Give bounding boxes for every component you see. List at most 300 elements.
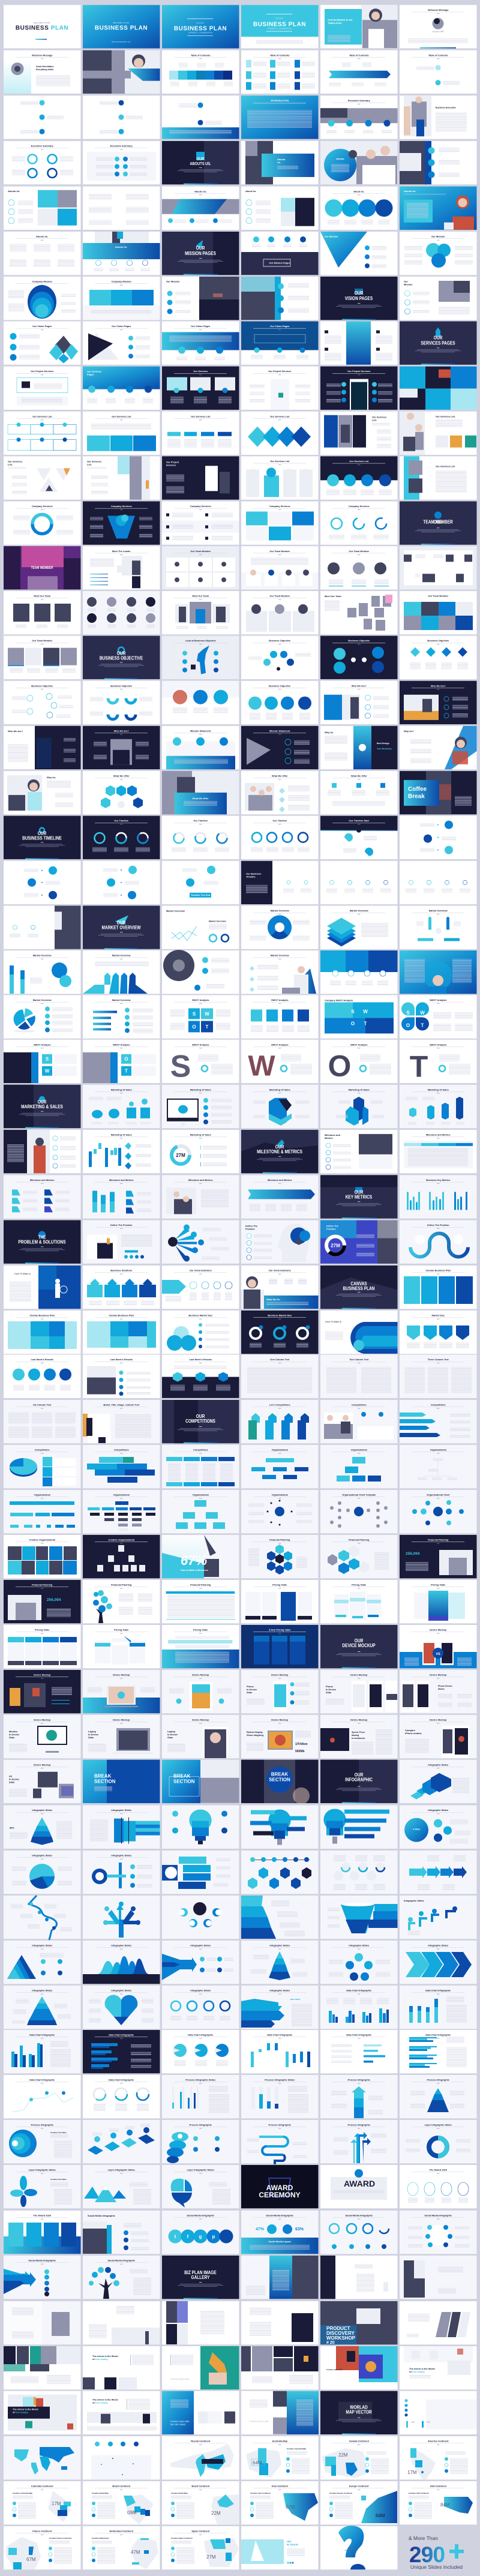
- slide: market overview horizontal bars: [83, 995, 160, 1039]
- slide: market overview man laptop: [241, 950, 318, 994]
- slide: france continent: France Continent: [32, 2530, 52, 2533]
- slide: timeline end: Timeline The End: [191, 893, 211, 896]
- slide: biz plan image gallery divider: BIZ PLAN IMAGE: [184, 2269, 217, 2275]
- slide: company services cycle: [4, 502, 80, 545]
- slide: six column text: Six Column Text: [33, 1404, 52, 1407]
- slide: infographic phone bars: Infographic Slides: [111, 1809, 131, 1812]
- slide: pricing table gradient: [162, 1625, 239, 1668]
- slide: data chart dark: Data Chart Infographic: [109, 2034, 134, 2037]
- slide: data chart horizontal: Data Chart Infographic: [346, 2034, 372, 2037]
- slide: speed from blazing: Device Mockup: [350, 1719, 368, 1722]
- slide: organizational wide: [4, 1490, 80, 1533]
- slide: abouts us blue box: [241, 141, 318, 184]
- slide: pricing table ribbon: Pricing Table: [114, 1629, 129, 1632]
- slide: laptop device: Laptop: [88, 1730, 97, 1733]
- slide: company services donuts: Company Services: [349, 505, 370, 508]
- slide: define the problem purple: [320, 1220, 397, 1264]
- slide: russia continent: [162, 2436, 239, 2479]
- slide: creative organizational dark: [83, 1535, 160, 1578]
- slide: product discovery workshop: WORKSHOP: [326, 2335, 356, 2341]
- slide: canvas treemap 1: Canvas Business Plan: [29, 1314, 55, 1317]
- slide: table of contents timeline: [400, 50, 476, 94]
- slide: infographic petals: [320, 1941, 397, 1984]
- slide: meet our team scattered: [320, 591, 397, 634]
- slide: competitions table: [162, 1445, 239, 1488]
- slide: infographic arrows: [400, 1851, 476, 1894]
- slide: about us divider: ABOUTS US.: [190, 162, 211, 166]
- slide: swot O T photo: SWOT Analysis: [113, 1043, 130, 1046]
- row 24: [4, 1040, 476, 1084]
- slide: asia continent: Asia Continent: [272, 2485, 289, 2488]
- slide: business objective dark circles: [320, 636, 397, 679]
- slide: swot O T photo: [83, 1040, 160, 1083]
- slide: executive summary photo band: Executive Summary: [348, 99, 371, 102]
- slide: what we offer icons: What We Offer: [351, 775, 367, 778]
- slide: coffee break: [400, 771, 476, 814]
- slide: swot big T: T: [410, 1050, 428, 1084]
- slide: our project services devices: Services: [166, 463, 176, 466]
- slide: our infographic divider: INFOGRAPHIC: [345, 1777, 373, 1783]
- slide: data chart groups: Data Chart Infographic: [346, 1989, 372, 1992]
- slide: our services photos: Our Services: [87, 460, 101, 463]
- row 12: [4, 502, 476, 545]
- slide: canvas business plan: Canvas Business Plan: [425, 1269, 451, 1272]
- slide: canvas treemap 1: [4, 1311, 80, 1354]
- slide: financial planning hexagons 2: Financial Planning: [349, 1539, 370, 1542]
- slide: data chart stacked: Data Chart Infographic: [425, 1989, 451, 1992]
- slide: milestone metrics divider: OUR: [275, 1144, 284, 1150]
- closing callout: more than 290 unique slides: 290: [409, 2542, 445, 2567]
- slide: swot big W: SWOT Analysis: [271, 1043, 289, 1046]
- slide: tablet device: In Device: [167, 1733, 178, 1736]
- slide: break section split: BREAK: [173, 1774, 191, 1779]
- slide: infographic steps: Infographic Slides: [404, 1899, 424, 1902]
- slide: cover 2020: 2020: [196, 22, 205, 24]
- slide: product discovery workshop: PRODUCT: [326, 2326, 350, 2331]
- slide: our team member four photos: Our Team Member: [32, 639, 53, 642]
- slide: speed from blazing: blazing: [352, 1734, 359, 1737]
- slide: process infographic discs: Process Infographic: [190, 2124, 212, 2127]
- slide: mirror of the world: of true beauty: [92, 2358, 109, 2361]
- slide: organizational tree: [162, 1490, 239, 1533]
- slide: tablet device: [162, 1715, 239, 1758]
- slide: what we offer icons: [320, 771, 397, 814]
- slide: marketing sales coins: [83, 1085, 160, 1128]
- slide: company mission nested ovals: Company Mission: [32, 280, 53, 283]
- slide: financial planning hexagons: [241, 1535, 318, 1578]
- slide: gallery four: [83, 2301, 160, 2344]
- slide: swot analysis squares: [162, 995, 239, 1039]
- slide: retina display: [241, 1715, 318, 1758]
- slide: pricing table 1: Pricing Table: [272, 1584, 287, 1587]
- slide: our vision pages divider: OUR: [355, 290, 364, 296]
- slide: our team member cards circles: Our Team Member: [269, 595, 290, 598]
- slide: company mission nested ovals: [4, 277, 80, 320]
- slide: swot big O: [320, 1040, 397, 1083]
- slide: netherland continent: Netherland Continent: [109, 2530, 134, 2533]
- slide: infographic heart: Infographic Slides: [111, 1989, 131, 1992]
- slide: company swot analysis: W: [363, 1009, 368, 1014]
- slide: our mission bridge photo: [400, 277, 476, 320]
- slide: data chart pies: Data Chart Infographic: [188, 2034, 214, 2037]
- slide: why us woman left: [4, 771, 80, 814]
- slide: swot analysis squares: O: [192, 1024, 196, 1030]
- slide: mission statement dark: Mission Statement: [269, 729, 290, 732]
- slide: timeline drops: [400, 816, 476, 859]
- slide: abouts us band: Abouts Us.: [194, 190, 207, 193]
- slide: infographic pyramid: 85%: [10, 1827, 14, 1830]
- slide: milestone metrics table: [400, 1130, 476, 1173]
- row 14: [4, 591, 476, 634]
- slide: device mockup vs phones: Device Mockup: [430, 1629, 447, 1632]
- slide: break section blue: SECTION: [94, 1779, 116, 1785]
- slide: world map dots: [400, 2391, 476, 2434]
- slide: spain continent: [162, 2526, 239, 2569]
- slide: our mission pages divider: [162, 232, 239, 275]
- slide: social media layout: 63%: [295, 2227, 304, 2232]
- slide: our timeline start: [320, 816, 397, 859]
- slide: marketing sales monitor: Marketing Of Sales: [190, 1088, 211, 1091]
- slide: company swot analysis: O: [351, 1021, 355, 1026]
- slide: marketing sales cubes: Marketing Of Sales: [349, 1088, 370, 1091]
- slide: canvas business plan divider: [320, 1265, 397, 1309]
- row 9: [4, 367, 476, 410]
- slide: social media donuts: Social Media Infographic: [345, 2214, 373, 2217]
- slide: milestone metrics chevrons: [241, 1175, 318, 1219]
- row 15: [4, 636, 476, 679]
- slide: product discovery workshop: [320, 2301, 397, 2345]
- slide: financial planning tree: [83, 1580, 160, 1623]
- slide: about us divider: OUR: [197, 157, 205, 161]
- slide: our competitions divider: [162, 1400, 239, 1443]
- row 50: [4, 2211, 476, 2254]
- slide: our project services phone: Our Project Services: [268, 370, 291, 373]
- slide: swot big O: SWOT Analysis: [350, 1043, 368, 1046]
- slide: speed from blazing: Speed, From: [352, 1731, 365, 1734]
- slide: infographic stairs: [400, 1760, 476, 1803]
- slide: gallery black panel: [320, 2256, 397, 2299]
- slide: business objective dark circles: Business Objective: [348, 639, 370, 642]
- slide: creative organizational: [4, 1535, 80, 1578]
- slide: our mission road: Our Mission Pages: [269, 262, 290, 264]
- slide: swot analysis squares: S: [193, 1011, 196, 1016]
- slide: marketing sales cubes: [320, 1085, 397, 1128]
- row 27: [4, 1175, 476, 1219]
- slide: all in device: Device Mockup: [34, 1763, 51, 1766]
- slide: marketing sales 3d pie: [241, 1085, 318, 1128]
- slide: swot big S: S: [170, 1049, 191, 1084]
- slide: device mockup tablet: Device Mockup: [192, 1674, 209, 1677]
- slide: infographic cone: [241, 1941, 318, 1984]
- slide: world map divider: MAP VECTOR: [346, 2409, 372, 2415]
- slide: market overview bars and circles: Market Overview: [33, 954, 52, 957]
- slide: social media donuts: [320, 2211, 397, 2254]
- slide: welcome message portrait: Everything better: [36, 68, 54, 71]
- slide: process infographic sphere: [4, 2120, 80, 2163]
- slide: asia continent: Creative Asia Continent: [250, 2492, 271, 2494]
- slide: business timeline divider: [4, 816, 80, 859]
- slide: market overview pie: Market Overview: [33, 998, 52, 1001]
- slide: swot O T photo: O: [124, 1057, 128, 1062]
- slide: pricing table 3: [400, 1580, 476, 1623]
- slide: speed from blazing: [320, 1715, 397, 1758]
- slide: market overview layers: [320, 905, 397, 949]
- slide: milestone metrics table: Milestone and Metrics: [426, 1133, 451, 1136]
- slide: timeline 2: [83, 95, 160, 139]
- slide: layer infographic butterfly: [4, 2165, 80, 2208]
- slide: marketing sales columns: [400, 1085, 476, 1128]
- slide: infographic arrow fan: Infographic Slides: [190, 1944, 211, 1947]
- slide: our team member six portraits: [400, 546, 476, 589]
- slide: company services list: Company Services: [190, 505, 211, 508]
- slide: cover white: [4, 5, 80, 49]
- slide: our project services box: Our Project Services: [31, 370, 53, 373]
- slide: look at business objective: Look at Business Objective: [185, 639, 216, 642]
- slide: business objective ring icons: Business Objective: [31, 684, 53, 687]
- row 19: [4, 816, 476, 859]
- slide: layer infographic ring: Layer Infographic Slides: [425, 2124, 452, 2127]
- slide: guitar woman: [4, 1130, 80, 1173]
- slide: who we are left: Who We Are?: [8, 730, 23, 733]
- slide: our mission pages divider: OUR: [196, 245, 205, 251]
- slide: our services photos: List.: [87, 463, 92, 466]
- slide: social media arrows: Social Media Infographic: [28, 2259, 56, 2262]
- slide: market overview up arrows: [83, 950, 160, 994]
- slide: data chart donuts: Data Chart Infographic: [109, 2079, 134, 2082]
- slide: pricing table 2: [320, 1580, 397, 1623]
- slide: swot O T photo: T: [125, 1069, 128, 1074]
- slide: netherland continent: Creative Netherland: [92, 2537, 109, 2539]
- slide: business objective pins: Business Objective: [269, 639, 291, 642]
- slide: milestone metrics street: Metrics: [325, 1136, 333, 1139]
- slide: executive summary panel: Executive Summary: [110, 145, 133, 148]
- slide: process infographic bars: [162, 2075, 239, 2118]
- slide: timeline with keyboard photo: [4, 905, 80, 949]
- slide: colombia continent: Creative Colombia Map: [13, 2492, 32, 2494]
- slide: abouts us with photos: [4, 187, 80, 230]
- slide: our mission triangle: Our Mission: [325, 235, 338, 238]
- slide: social media central: Social Media Infographic: [424, 2214, 452, 2217]
- slide: infographic waves: [241, 1896, 318, 1939]
- slide: marketing sales columns: Marketing Of Sales: [428, 1088, 449, 1091]
- slide: cyan panel 14: [241, 2391, 319, 2434]
- slide: about us band icons: Abouts Us.: [115, 245, 127, 248]
- slide: device mockup phone: Phone: [247, 1685, 254, 1688]
- slide: swot clover: T: [421, 1022, 424, 1028]
- slide: financial planning table: Financial Planning: [190, 1584, 211, 1587]
- slide: infographic steps: [400, 1896, 476, 1939]
- slide: abouts us blue box: Us.: [277, 161, 281, 164]
- slide: business objective divider: OUR: [117, 650, 126, 656]
- slide: social media layout: Social Media Layout: [268, 2240, 291, 2243]
- slide: organizational 2: Organizational: [351, 1449, 367, 1452]
- slide: retina display: Device Mockup: [271, 1719, 289, 1722]
- slide: financial planning dark photo: Financial Planning: [428, 1539, 449, 1542]
- slide: our team member cards: [162, 546, 239, 589]
- slide: our services list bars: [162, 412, 239, 455]
- slide: marketing sales divider: [4, 1085, 80, 1128]
- slide: marketing sales monitor: [162, 1085, 239, 1128]
- slide: mirror with row of images: [83, 2391, 160, 2434]
- slide: cover 2020: [162, 5, 239, 49]
- slide: social media infographic building: Social Media Infographic: [88, 2214, 116, 2217]
- slide: organizational chart circles: [400, 1490, 476, 1533]
- slide: cover 2020: STRATEGY | CORPORATION: [188, 32, 212, 34]
- row 1: [4, 5, 476, 49]
- slide: market overview line chart: Market Overview: [209, 920, 226, 922]
- slide: team member divider: TEAM MEMBER: [423, 519, 453, 525]
- slide: business timeline divider: BUSINESS TIMELINE: [22, 835, 62, 841]
- slide: our services three portraits: List.: [372, 419, 377, 422]
- slide: product discovery workshop: # 20: [326, 2341, 335, 2345]
- slide: business solutions: Business Solutions: [110, 1269, 132, 1272]
- slide: infographic 3 step: 3 Step: [413, 1828, 420, 1831]
- slide: swot S W photo: W: [45, 1069, 50, 1074]
- slide: meet our team three: [4, 591, 80, 634]
- slide: data chart line: [4, 2075, 80, 2118]
- slide: data chart line: Data Chart Infographic: [29, 2079, 55, 2082]
- slide: our services list diamonds: Our Services List: [270, 415, 290, 418]
- slide: infographic bulb: [162, 1806, 239, 1849]
- slide: business objective diamonds: Business Objective: [427, 639, 449, 642]
- row 54: [4, 2391, 476, 2434]
- slide: three column text: Three Column Text: [428, 1358, 449, 1361]
- slide: our timeline dark donuts: Our Timeline: [114, 819, 129, 822]
- slide: our services pages band: [83, 367, 160, 410]
- slide: milestone metrics photo: Milestone and Metrics: [188, 1178, 213, 1181]
- slide: our services list diamonds: [241, 412, 318, 455]
- slide: retina display: Show stopping.: [247, 1734, 264, 1737]
- slide: last weeks results circles: [4, 1355, 80, 1398]
- slide: compare iphone models: Device Mockup: [430, 1719, 447, 1722]
- slide: our team member cards circles: [241, 591, 318, 634]
- slide: brazil continent 2: [162, 2481, 239, 2524]
- slide: about us band icons: [83, 232, 160, 275]
- slide: canvas treemap 2: Canvas Business Plan: [109, 1314, 134, 1317]
- slide: process infographic pyramid: [400, 2075, 476, 2118]
- slide: break section blue: BREAK: [94, 1774, 112, 1779]
- slide: company services tiles: [241, 502, 318, 545]
- row 43: [4, 1896, 476, 1940]
- slide: spain continent: 27M: [206, 2554, 216, 2560]
- slide: our great solutions woman: What We Do: [266, 1298, 280, 1301]
- slide: our team member four photos: [4, 636, 80, 679]
- slide: cover 2020: BUSINESS PLAN: [174, 25, 227, 32]
- slide: our timeline donuts: Our Timeline: [193, 819, 208, 822]
- slide: australia map: 64M: [253, 2460, 262, 2466]
- slide: financial planning dark photo 2: 256,094: [47, 1598, 61, 1602]
- slide: swot clover: SWOT Analysis: [430, 998, 447, 1001]
- slide: business market size venn: [162, 1311, 239, 1354]
- slide: why us best design: Best Design: [377, 742, 389, 745]
- slide: device mockup vs phones: VS: [436, 1653, 440, 1656]
- slide: our mission triangle: [320, 232, 397, 275]
- slide: organizational radial: Organizational: [272, 1494, 288, 1497]
- slide: business key metrics: Business Key Metrics: [426, 1178, 450, 1181]
- slide: pricing table 2: Pricing Table: [352, 1584, 367, 1587]
- slide: market overview cycle: [241, 905, 318, 949]
- slide: infographic pyramid: [4, 1806, 80, 1849]
- slide: colombia continent: Colombia Continent: [31, 2485, 53, 2488]
- slide: why us best design: Your Business: [377, 748, 392, 750]
- slide: device mockup dark: Device Mockup: [34, 1674, 51, 1677]
- slide: phone device slides: [400, 1670, 476, 1713]
- slide: business objective divider: [83, 636, 160, 679]
- slide: our team member three circles: [320, 546, 397, 589]
- slide: define the problem wave: [400, 1220, 476, 1264]
- slide: swot clover: [400, 995, 476, 1039]
- slide: the award 2020: [400, 2165, 476, 2208]
- slide: device mockup vs phones: [400, 1625, 476, 1668]
- slide: gallery parallelograms: [400, 2301, 476, 2344]
- slide: all in device: [4, 1760, 80, 1803]
- slide: company swot analysis: [320, 995, 397, 1039]
- slide: process infographic pyramid: Process Infographic: [427, 2079, 450, 2082]
- slide: about us dark photo: [241, 187, 318, 230]
- slide: milestone metrics street: Milestone and: [325, 1133, 341, 1136]
- slide: milestone metrics tags: Milestone and Metrics: [30, 1178, 55, 1181]
- slide: financial planning tree: Financial Planning: [111, 1584, 132, 1587]
- slide: market overview blue photo: [320, 950, 397, 994]
- slide: gallery five: [162, 2301, 239, 2344]
- slide: why us woman: [400, 726, 476, 769]
- slide: process infographic up arrows: [320, 2120, 397, 2163]
- slide: our services dark three photos: [162, 367, 239, 410]
- slide: data chart dark: [83, 2030, 160, 2073]
- slide: our business timeline navy: [241, 861, 318, 904]
- slide: pricing table 4 columns: [4, 1625, 80, 1668]
- slide: social media circles: Social Media Infographic: [187, 2214, 215, 2217]
- slide: device mockup phones: In Device: [326, 1688, 337, 1691]
- slide: infographic chevron band: [400, 1941, 476, 1984]
- slide: australia map: Creative Australia Map: [287, 2448, 306, 2450]
- slide: business market size dark donuts: Business Market Size: [268, 1314, 292, 1317]
- slide: milestone metrics stacked bars: [83, 1175, 160, 1219]
- slide: timeline end: [162, 861, 239, 904]
- slide: gallery eating: Fortune sides with: [170, 2377, 190, 2380]
- slide: our services pages divider: SERVICES PAGES: [421, 340, 455, 346]
- slide: our great solutions woman: [241, 1265, 318, 1309]
- slide: break section blue: [83, 1760, 160, 1803]
- slide: data chart stacked: [400, 1986, 476, 2029]
- slide: our mission bridge photo: Mission: [404, 283, 413, 286]
- slide: question and answer session: SESSION: [349, 2552, 357, 2554]
- slide: financial planning table: [162, 1580, 239, 1623]
- slide: 3 item pricing table: [241, 1625, 318, 1668]
- slide: france continent: 67M: [26, 2557, 36, 2562]
- slide: look at business objective: [162, 636, 239, 679]
- slide: mirror of the world: [83, 2346, 160, 2389]
- row 25: [4, 1085, 476, 1128]
- slide: device mockup phone: Device Mockup: [271, 1674, 289, 1677]
- slide: swot analysis tiles: [241, 995, 318, 1039]
- slide: business key metrics: [400, 1175, 476, 1219]
- slide: infographic 3 step: [400, 1806, 476, 1849]
- slide: our timeline four rings: Our Timeline: [272, 819, 287, 822]
- slide: define the problem purple: 27M: [331, 1243, 340, 1248]
- row 57: [4, 2526, 464, 2570]
- slide: market size pentagons: [400, 1311, 476, 1354]
- slide: europe continent: [320, 2481, 397, 2524]
- slide: 67 percent photo: 67%: [181, 1553, 207, 1568]
- slide: france continent: [4, 2526, 80, 2569]
- slide: infographic fold arrows: [241, 1986, 318, 2029]
- slide: device mockup phones: Phone: [326, 1685, 334, 1688]
- slide: layer infographic puzzle: Layer Infographic Slides: [187, 2169, 214, 2172]
- slide: business solutions: [83, 1265, 160, 1309]
- slide: europe continent: Creative Europe Continent: [329, 2492, 352, 2494]
- slide: our vision pages divider: [320, 277, 397, 320]
